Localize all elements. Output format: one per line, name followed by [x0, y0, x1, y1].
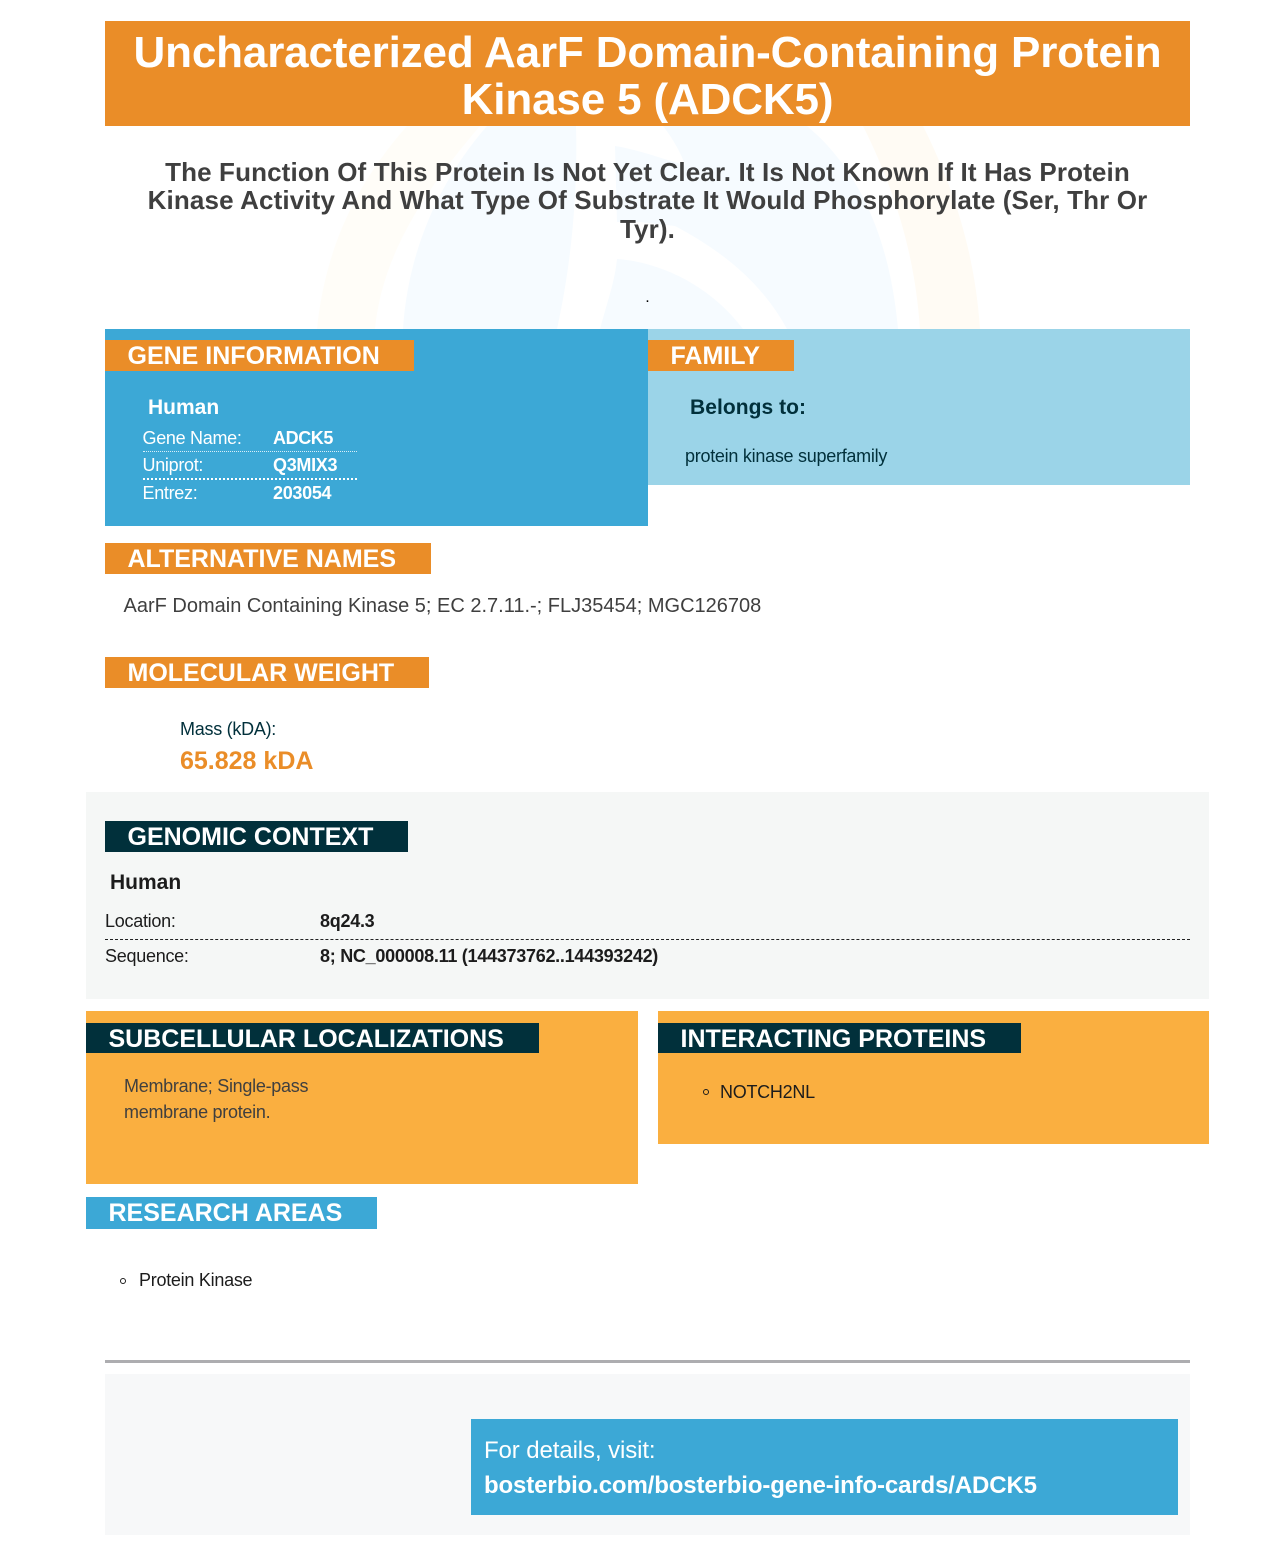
entrez row [142, 482, 332, 502]
panel: footer [105, 1374, 1190, 1535]
divider [105, 1360, 1190, 1363]
subtitle description [148, 156, 1147, 244]
visit label: For details, visit: [484, 1437, 655, 1464]
uniprot row [142, 452, 357, 480]
gene name row: ADCK5 [273, 428, 333, 448]
title line 1: Uncharacterized AarF Domain-Containing Protein [133, 28, 1162, 77]
location row: Location: [105, 911, 176, 931]
subtitle description: Kinase Activity And What Type Of Substrate It Would Phosphorylate (Ser, Thr Or [148, 185, 1147, 215]
alternative names text: AarF Domain Containing Kinase 5; EC 2.7.11.-; FLJ35454; MGC126708 [124, 595, 761, 617]
heading: interacting proteins: INTERACTING PROTEINS [680, 1025, 986, 1053]
panel: interacting proteins [658, 1011, 1209, 1144]
heading: family: FAMILY [670, 342, 760, 370]
panel: gene information [105, 329, 648, 526]
list item: NOTCH2NL: NOTCH2NL [720, 1082, 815, 1102]
localization text [124, 1076, 308, 1122]
localization text: Membrane; Single-pass [124, 1076, 308, 1096]
uniprot row: Uniprot: [142, 454, 203, 474]
mass label: Mass (kDA): [180, 719, 276, 739]
panel: subcellular localizations [86, 1011, 638, 1184]
species label: Human [110, 871, 181, 894]
title line 2: Kinase 5 (ADCK5) [462, 75, 833, 124]
gene name row: Gene Name: [142, 428, 242, 448]
dot text: . [645, 289, 650, 306]
heading: research areas: RESEARCH AREAS [108, 1199, 342, 1227]
sequence row: 8; NC_000008.11 (144373762..144393242) [320, 946, 658, 966]
localization text: membrane protein. [124, 1102, 270, 1122]
list item: protein kinase: Protein Kinase [139, 1270, 252, 1290]
heading: family [648, 340, 794, 371]
heading: gene information: GENE INFORMATION [128, 342, 380, 370]
species label: Human [148, 396, 219, 419]
callout: details link [471, 1419, 1178, 1515]
belongs to label: Belongs to: [690, 396, 806, 419]
panel: family [648, 329, 1190, 485]
url: bosterbio.com/bosterbio-gene-info-cards/ADCK5 [484, 1472, 1037, 1499]
heading: subcellular localizations: SUBCELLULAR LOCALIZATIONS [108, 1025, 504, 1053]
family value: protein kinase superfamily [685, 446, 887, 466]
panel: genomic context [86, 792, 1209, 999]
mass value: 65.828 kDA [180, 747, 313, 775]
sequence row: Sequence: [105, 946, 189, 966]
background watermark [403, 126, 980, 329]
heading: alternative names: ALTERNATIVE NAMES [128, 545, 396, 573]
gene name row [142, 425, 357, 452]
heading: genomic context: GENOMIC CONTEXT [128, 823, 373, 851]
subtitle description: The Function Of This Protein Is Not Yet Clear. It Is Not Known If It Has Protein [165, 156, 1130, 186]
entrez row: 203054 [273, 482, 331, 502]
location row: 8q24.3 [320, 911, 374, 931]
sequence row [105, 946, 658, 966]
uniprot row: Q3MIX3 [273, 454, 337, 474]
location row [105, 904, 1190, 940]
entrez row: Entrez: [142, 482, 197, 502]
subtitle description: Tyr). [620, 214, 675, 244]
title banner [105, 21, 1190, 126]
heading: molecular weight: MOLECULAR WEIGHT [128, 659, 394, 687]
